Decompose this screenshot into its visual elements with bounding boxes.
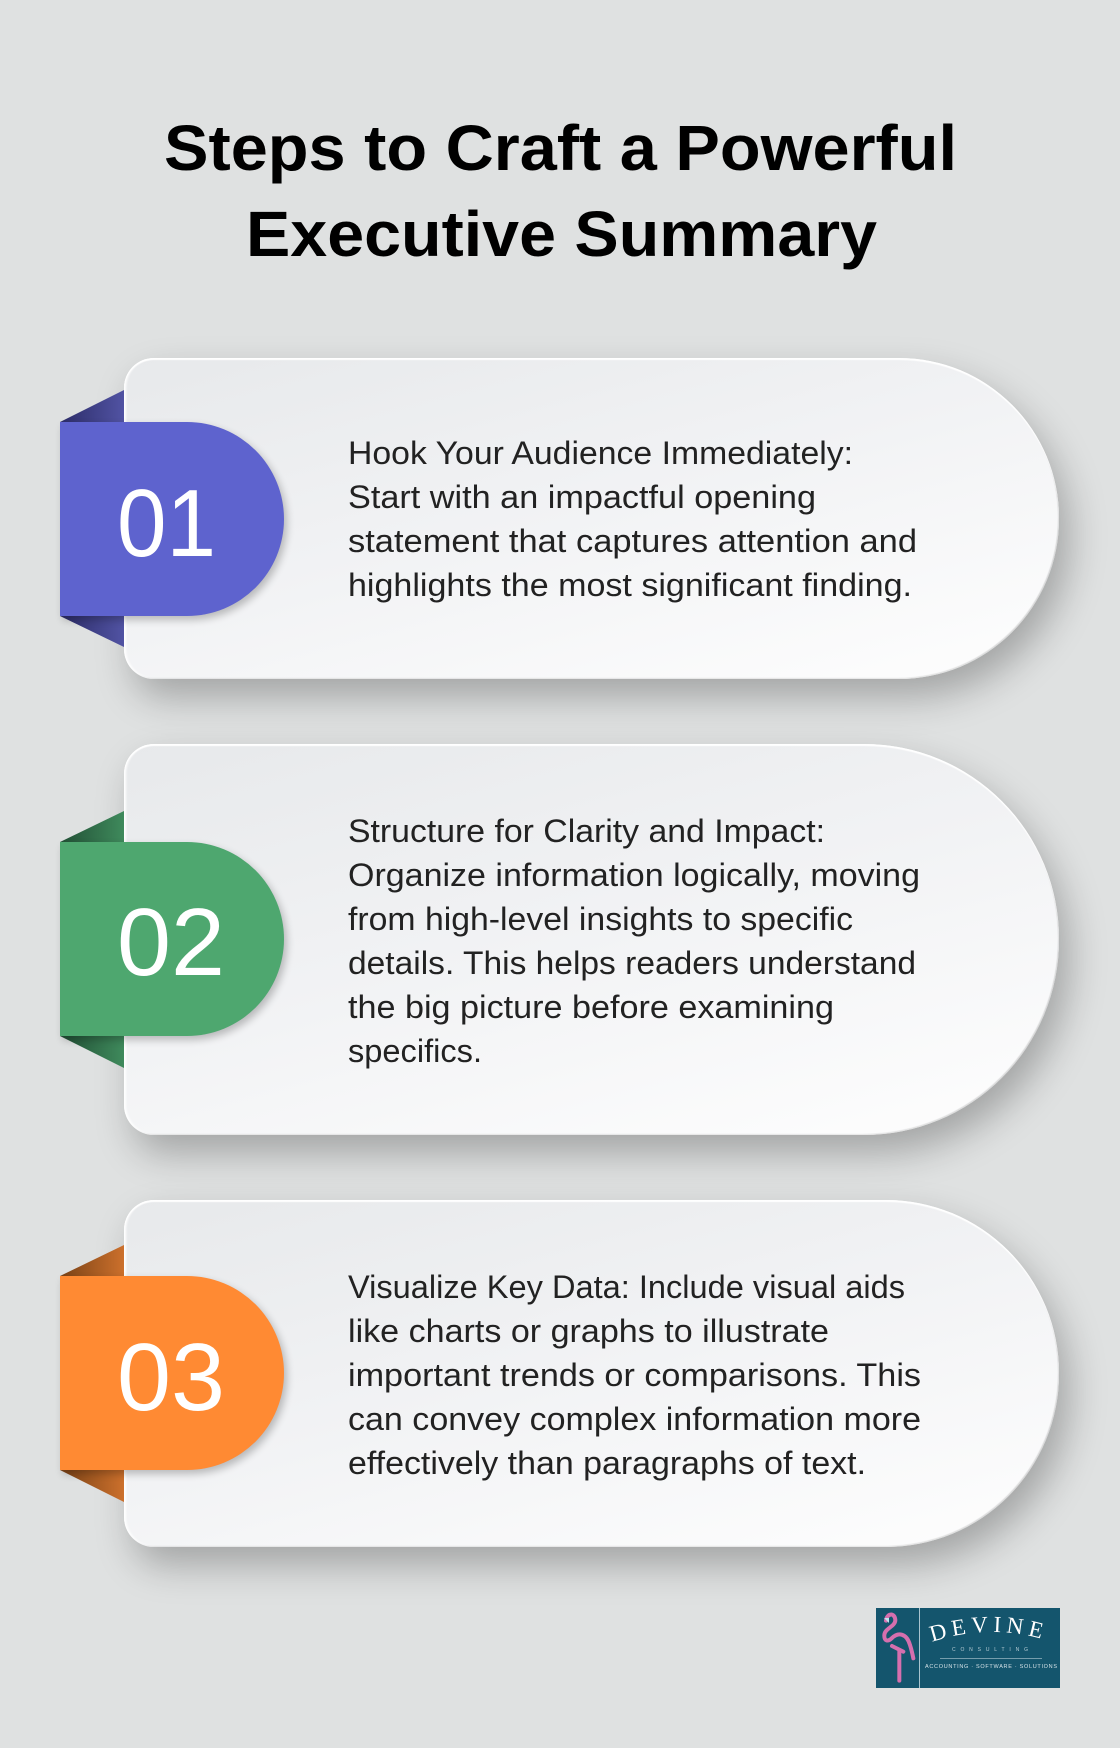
title: Steps to Craft a Powerful — [164, 112, 957, 184]
step 02 text: Organize information logically, moving — [348, 857, 920, 893]
ribbon folds 03 — [60, 1245, 124, 1502]
ribbon folds 02 — [60, 811, 124, 1068]
logo: Devine Consulting: ACCOUNTING · SOFTWARE · SOLUTIONS — [925, 1664, 1057, 1670]
panel: step 02 — [59, 742, 1088, 1172]
card background 01 — [124, 358, 1059, 679]
step 03 text: important trends or comparisons. This — [348, 1357, 921, 1393]
card background 03 — [124, 1200, 1059, 1547]
step 01 text: statement that captures attention and — [348, 523, 917, 559]
step 03 text: like charts or graphs to illustrate — [348, 1313, 829, 1349]
step 03 text — [348, 1269, 921, 1481]
step 02 text: the big picture before examining — [348, 989, 834, 1025]
title — [164, 112, 957, 270]
step 03 text: can convey complex information more — [348, 1401, 921, 1437]
ribbon folds 01 — [60, 390, 124, 647]
number badge 01 — [60, 422, 284, 616]
step 02 text: Structure for Clarity and Impact: — [348, 813, 825, 849]
logo: Devine Consulting — [876, 1608, 1060, 1688]
panel: step 03 — [59, 1198, 1088, 1584]
logo: Devine Consulting: CONSULTING — [952, 1647, 1028, 1653]
step 01 text: Hook Your Audience Immediately: — [348, 435, 853, 471]
step 01 text — [348, 435, 917, 603]
icon: flamingo — [884, 1615, 913, 1681]
step 03 text: Visualize Key Data: Include visual aids — [348, 1269, 905, 1305]
number 01: 01 — [117, 470, 216, 577]
card background 02 — [124, 744, 1059, 1135]
step 02 text: details. This helps readers understand — [348, 945, 916, 981]
step 02 text: from high-level insights to specific — [348, 901, 853, 937]
step 03 text: effectively than paragraphs of text. — [348, 1445, 866, 1481]
logo: Devine Consulting: DEVINE — [928, 1616, 1043, 1642]
number badge 02 — [60, 842, 284, 1036]
number 02: 02 — [117, 889, 225, 996]
step 01 text: highlights the most significant finding. — [348, 567, 912, 603]
step 01 text: Start with an impactful opening — [348, 479, 816, 515]
panel: step 01 — [59, 356, 1088, 716]
step 02 text: specifics. — [348, 1033, 482, 1069]
step 02 text — [348, 813, 920, 1069]
number badge 03 — [60, 1276, 284, 1470]
number 03: 03 — [117, 1324, 225, 1431]
title: Executive Summary — [246, 198, 877, 270]
logo wordmark — [932, 1632, 1052, 1642]
